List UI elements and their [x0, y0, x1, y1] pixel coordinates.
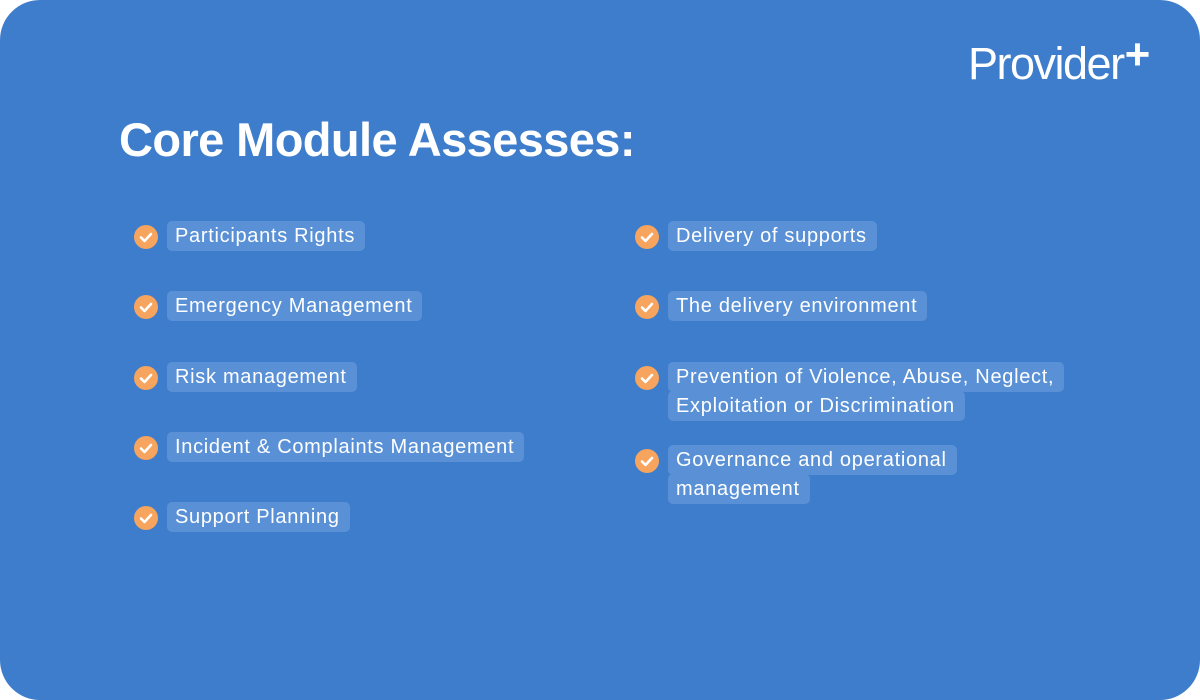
- item: Emergency Management: [134, 291, 422, 321]
- item: The delivery environment: [635, 291, 927, 321]
- item: Prevention of Violence: Exploitation or Discrimination: [676, 395, 955, 417]
- item: Incident & Complaints Management: Incident & Complaints Management: [175, 436, 514, 458]
- item: Delivery of supports: [635, 221, 877, 251]
- item: Support Planning: Support Planning: [175, 506, 340, 528]
- item: Risk management: Risk management: [175, 366, 347, 388]
- item: Governance and operational management: Governance and operational: [676, 449, 947, 471]
- item: Risk management: [134, 362, 357, 392]
- item: Prevention of Violence: Prevention of Violence, Abuse, Neglect,: [676, 366, 1054, 388]
- item: Incident & Complaints Management: [134, 432, 524, 462]
- logo: Provider+: [968, 30, 1149, 89]
- item: Delivery of supports: Delivery of supports: [676, 225, 867, 247]
- item: Participants Rights: Participants Rights: [175, 225, 355, 247]
- item: The delivery environment: The delivery environment: [676, 295, 917, 317]
- item: Governance and operational management: management: [676, 478, 800, 500]
- item: Prevention of Violence: [635, 362, 1064, 421]
- item: Governance and operational management: [635, 445, 957, 504]
- item: Emergency Management: Emergency Management: [175, 295, 412, 317]
- title: Core Module Assesses:: [119, 113, 635, 166]
- item: Participants Rights: [134, 221, 365, 251]
- item: Support Planning: [134, 502, 350, 532]
